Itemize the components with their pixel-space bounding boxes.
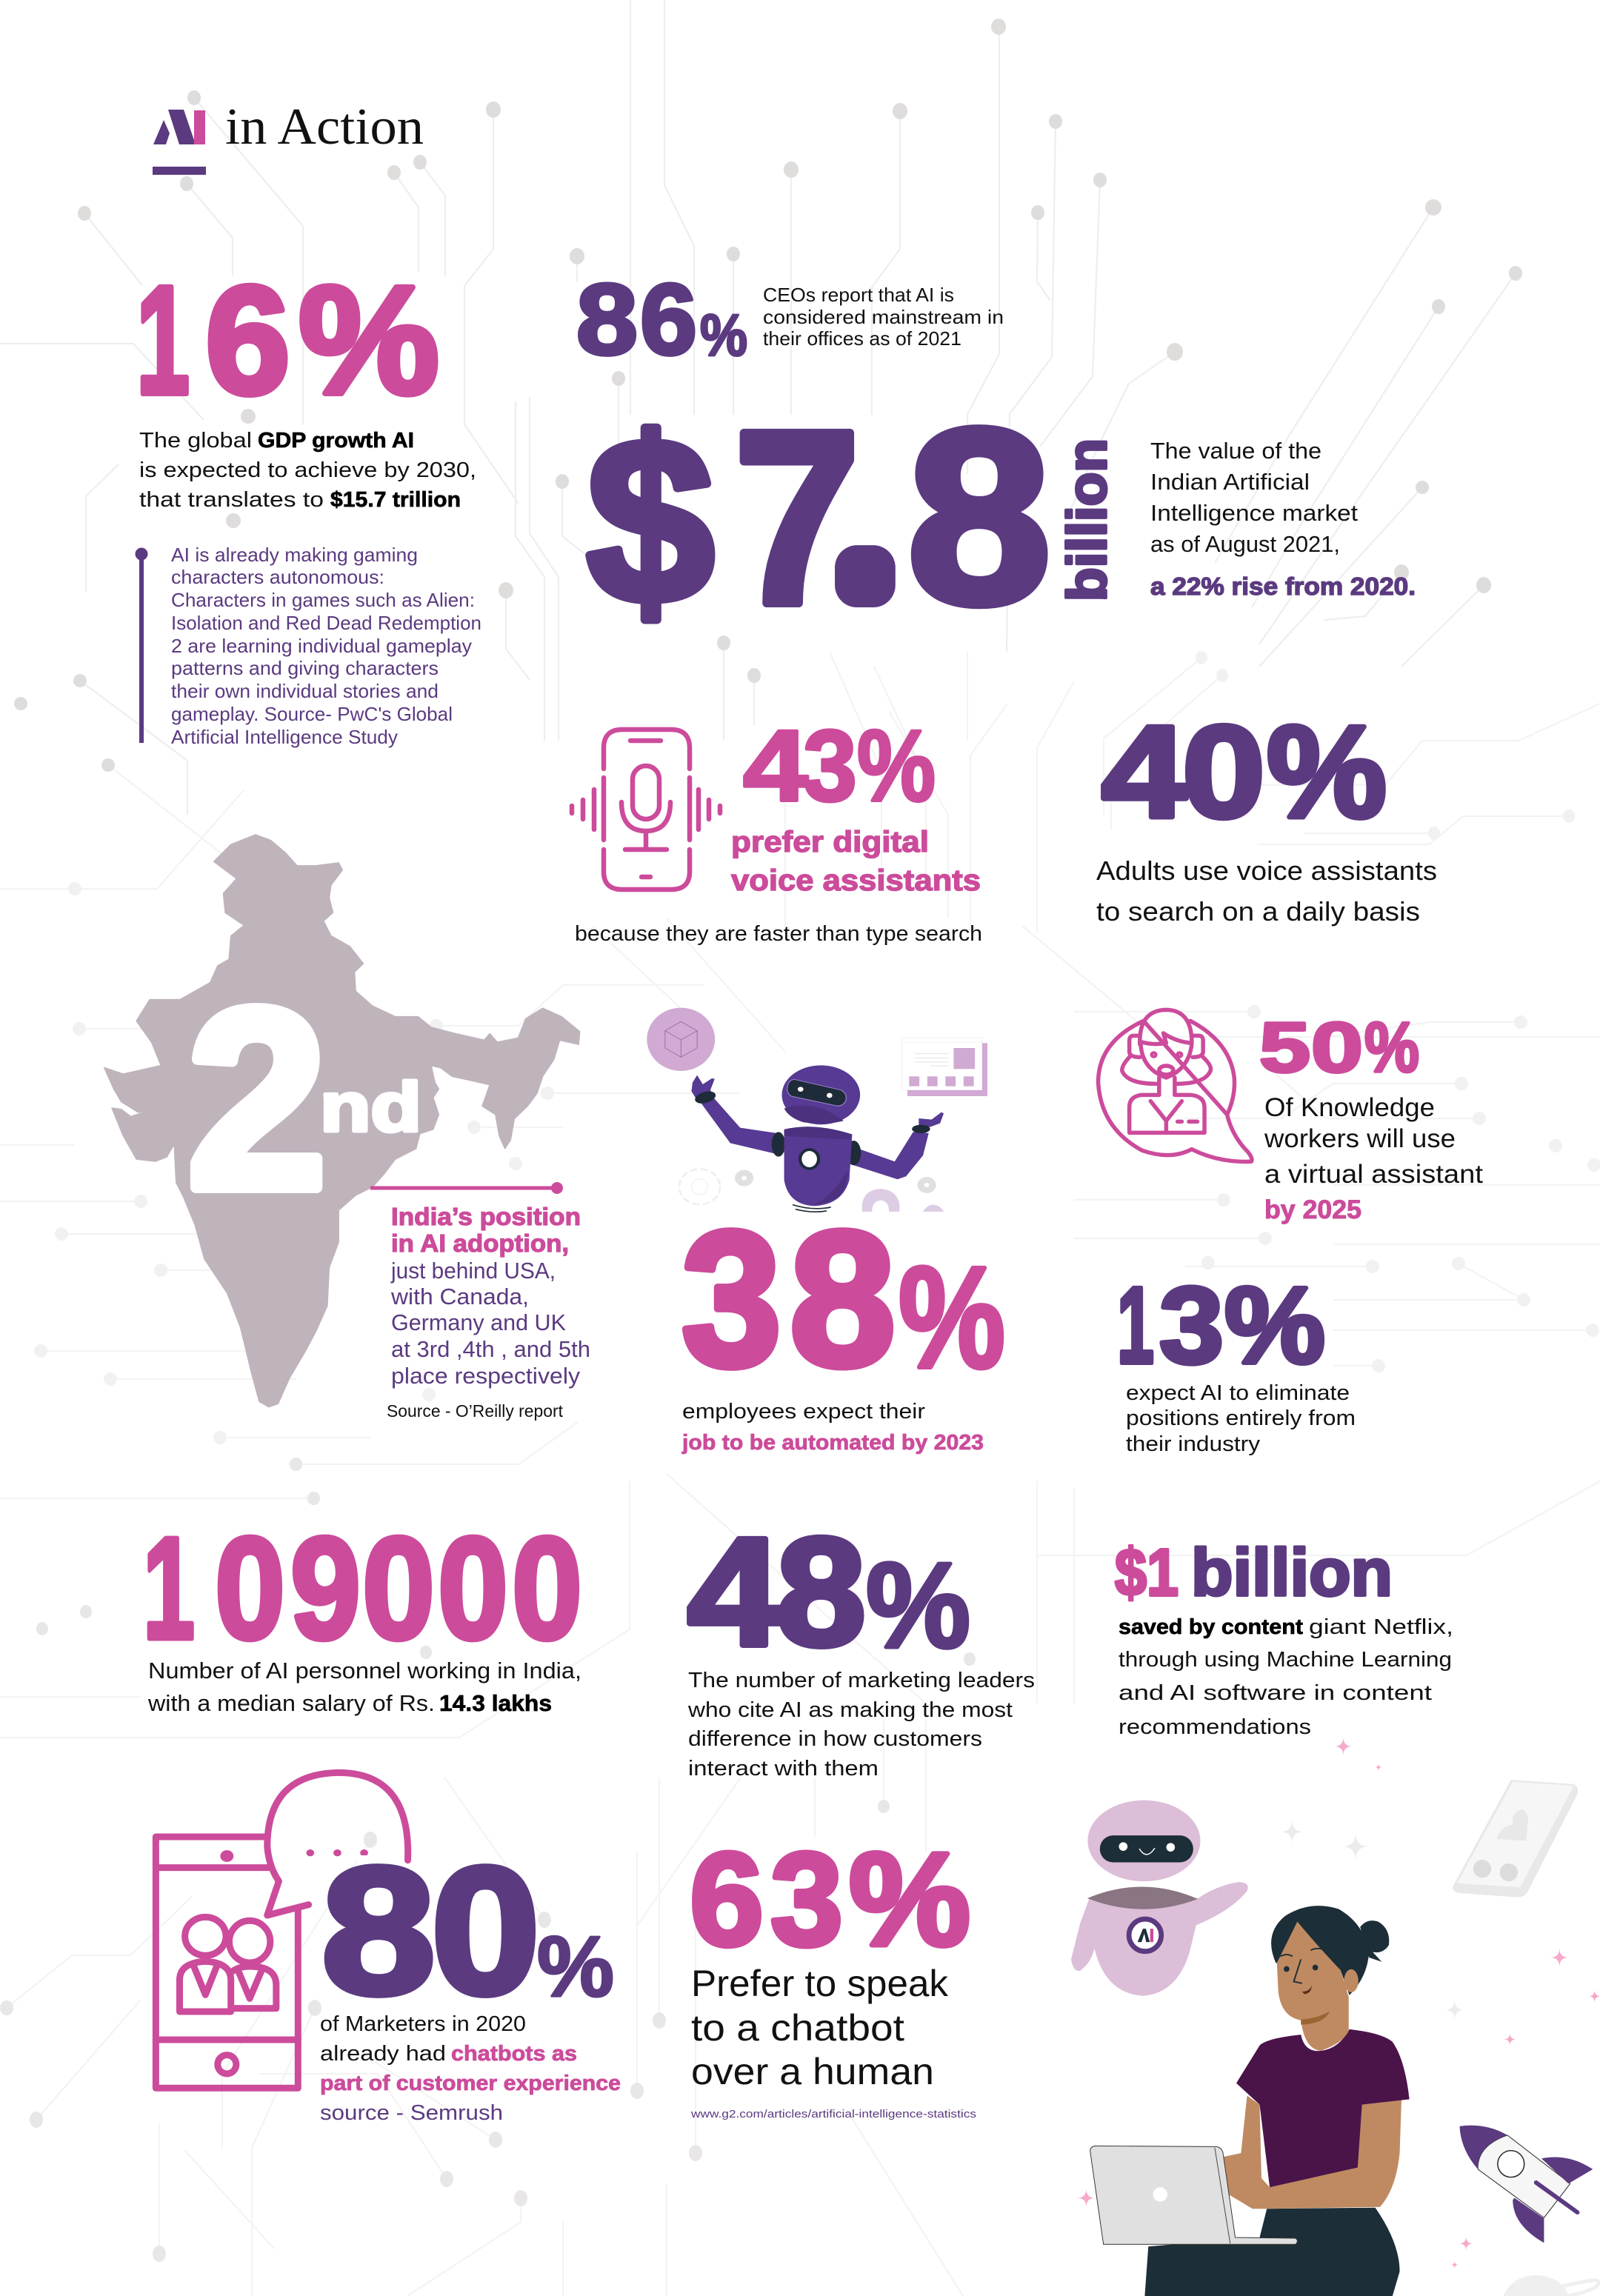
callout: gaming characters: gameplay. Source- PwC's Global [171,703,453,725]
stat: $7.8 billion Indian AI market: billion [1056,438,1118,601]
callout: India's position in AI adoption: India’s position [391,1203,581,1230]
icon: virtual assistant speech bubble [1099,1009,1252,1161]
stat: $7.8 billion Indian AI market [587,378,1416,655]
stat: $7.8 billion Indian AI market: $ [587,390,714,653]
illustration: laptop [1090,2146,1297,2244]
icon: phone with microphone [572,730,720,890]
stat: 43% prefer digital voice assistants: because they are faster than type search [575,922,982,946]
illustration: rocket [1459,2126,1593,2243]
stat: 50% knowledge workers: 5 [1259,1008,1310,1087]
illustration: woman at laptop [1144,1906,1410,2296]
stat: 40% adults use voice assistants: 4 [1101,698,1187,845]
stat: 109000 AI personnel: 14.3 lakhs [439,1690,552,1716]
stat: $7.8 billion Indian AI market: Indian Artificial [1150,469,1310,495]
stat: 43% prefer digital voice assistants [575,710,982,946]
stat: $1 billion Netflix: and AI software in content [1119,1681,1432,1705]
stat: 80% marketers chatbots: of Marketers in 2020 [320,2012,526,2036]
icon: gears [679,1169,944,1212]
stat: 16% GDP growth: The global [139,429,252,453]
stat: 38% job automation: job to be automated by 2023 [681,1431,984,1455]
stat: 63% prefer chatbot [690,1825,976,2120]
stat: 50% knowledge workers: Of Knowledge [1264,1093,1435,1122]
stat: 40% adults use voice assistants [1096,698,1437,927]
stat: 48% marketing leaders: who cite AI as making the most [687,1698,1013,1722]
stat: 80% marketers chatbots: 0 [431,1829,540,2032]
stat: 109000 AI personnel [143,1507,582,1716]
sparkles [1334,1737,1600,2269]
icon: browser window [901,1038,987,1096]
stat: 16% GDP growth: that translates to [139,488,324,512]
stat: 16% GDP growth: % [299,255,439,427]
stat: 13% eliminate positions: % [1224,1265,1325,1386]
stat: $7.8 billion Indian AI market: a 22% rise from 2020. [1150,573,1416,600]
stat: 13% eliminate positions: expect AI to eliminate [1126,1381,1350,1405]
stat: 50% knowledge workers: by 2025 [1264,1195,1361,1224]
illustration: pink robot [1071,1801,1248,1996]
stat: 13% eliminate positions: 1 [1117,1265,1154,1386]
callout: gaming characters: Artificial Intelligence Study [171,726,398,748]
stat: 48% marketing leaders [687,1506,1035,1781]
stat: 63% prefer chatbot: 3 [770,1825,843,1973]
stat: 38% job automation: employees expect their [682,1400,925,1424]
icon: tilted phone [1453,1780,1578,1898]
stat: 38% job automation: 8 [790,1192,896,1406]
stat: $1 billion Netflix: through using Machine Learning [1119,1648,1452,1672]
callout: India's position in AI adoption: at 3rd ,4th , and 5th [391,1336,590,1362]
stat: 48% marketing leaders: % [866,1538,970,1673]
callout: India's position in AI adoption: with Canada, [390,1284,529,1309]
stat: 43% prefer digital voice assistants: 3 [803,710,857,823]
stat: 43% prefer digital voice assistants: voice assistants [731,864,981,897]
stat: 63% prefer chatbot: 6 [690,1825,764,1973]
stat: 109000 AI personnel: 0 [512,1507,582,1669]
stat: $7.8 billion Indian AI market: as of August 2021, [1150,531,1340,557]
stat: 48% marketing leaders: interact with them [688,1757,879,1781]
stat: 80% marketers chatbots: source - Semrush [320,2101,503,2125]
map: India with 2nd: nd [320,1068,421,1146]
icon: phone with chat bubble and people [156,1772,408,2088]
stat: 80% marketers chatbots: part of customer experience [320,2072,621,2095]
illustration: purple robot [647,1008,987,1212]
stat: 50% knowledge workers: 0 [1311,1008,1363,1087]
callout: India's position in AI adoption [370,1182,590,1421]
stat: 109000 AI personnel: 0 [438,1507,508,1669]
callout: India's position in AI adoption: Source - O’Reilly report [387,1401,564,1421]
stat: 63% prefer chatbot: % [849,1825,970,1973]
stat: $7.8 billion Indian AI market: 8 [907,378,1051,655]
callout: gaming characters: characters autonomous: [171,566,384,588]
callout: gaming characters: AI is already making gaming [171,544,418,566]
stat: 40% adults use voice assistants: to search on a daily basis [1096,896,1420,927]
stat: 80% marketers chatbots [320,1829,621,2125]
stat: 109000 AI personnel: 9 [290,1507,361,1669]
callout: India's position in AI adoption: Germany and UK [391,1309,566,1335]
stat: 80% marketers chatbots: 8 [321,1829,436,2032]
callout: gaming characters: patterns and giving characters [171,657,439,679]
illustration: woman with laptop, robot, rocket and phone [1071,1737,1600,2296]
stat: 43% prefer digital voice assistants: prefer digital [731,826,929,858]
stat: $1 billion Netflix: giant Netflix, [1309,1615,1453,1639]
map: India with 2nd [104,835,580,1407]
stat: 109000 AI personnel: Number of AI personnel working in India, [148,1658,581,1683]
stat: 38% job automation: 3 [681,1192,781,1406]
stat: 86% CEOs: 6 [640,263,697,376]
stat: $7.8 billion Indian AI market: The value of the [1150,438,1321,464]
stat: $1 billion Netflix: $1 [1115,1536,1179,1610]
stat: $7.8 billion Indian AI market: Intelligence market [1150,500,1358,526]
stat: 13% eliminate positions: their industry [1126,1432,1261,1456]
stat: 50% knowledge workers: a virtual assistant [1264,1160,1483,1189]
callout: gaming characters [135,544,481,748]
stat: 48% marketing leaders: 8 [776,1506,866,1678]
stat: 63% prefer chatbot: www.g2.com/articles/artificial-intelligence-statistics [690,2108,976,2120]
stat: 86% CEOs: CEOs report that AI is [763,284,954,306]
callout: India's position in AI adoption: in AI adoption, [391,1229,569,1257]
callout: gaming characters: Isolation and Red Dead Redemption [171,612,481,634]
stat: 16% GDP growth: 6 [205,255,290,427]
stat: $1 billion Netflix: recommendations [1119,1715,1311,1739]
stat: 86% CEOs: considered mainstream in [763,306,1004,328]
stat: 16% GDP growth [136,255,476,512]
stat: $1 billion Netflix: billion [1191,1536,1393,1610]
callout: gaming characters: their own individual stories and [171,680,439,702]
stat: 80% marketers chatbots: chatbots as [451,2042,577,2066]
stat: 13% eliminate positions: positions entirely from [1126,1406,1356,1430]
stat: 40% adults use voice assistants: 0 [1182,698,1265,845]
stat: 16% GDP growth: GDP growth AI [258,429,414,453]
stat: 109000 AI personnel: 0 [215,1507,285,1669]
stat: 48% marketing leaders: The number of marketing leaders [688,1669,1035,1692]
callout: India's position in AI adoption: just behind USA, [390,1258,556,1284]
map: India with 2nd: 2 [187,957,327,1242]
stat: 48% marketing leaders: difference in how customers [688,1727,982,1751]
title: AI in Action [153,99,424,175]
stat: 43% prefer digital voice assistants: 4 [743,710,808,823]
stat: 48% marketing leaders: 4 [687,1506,781,1678]
stat: 16% GDP growth: is expected to achieve by 2030, [139,458,476,482]
stat: 86% CEOs: their offices as of 2021 [763,327,961,350]
stat: 109000 AI personnel: with a median salary of Rs. [147,1690,435,1716]
stat: 16% GDP growth: $15.7 trillion [330,488,461,512]
illustration: planet [1502,2275,1599,2296]
stat: 50% knowledge workers: % [1364,1008,1419,1087]
stat: 13% eliminate positions: 3 [1159,1265,1224,1386]
stat: 109000 AI personnel: 0 [362,1507,435,1669]
stat: 80% marketers chatbots: % [537,1918,614,2015]
stat: 13% eliminate positions [1117,1265,1356,1456]
stat: 40% adults use voice assistants: % [1267,698,1387,845]
stat: 109000 AI personnel: 1 [143,1507,195,1669]
callout: gaming characters: 2 are learning individual gameplay [171,635,472,657]
stat: 63% prefer chatbot: Prefer to speak [691,1963,949,2004]
stat: 63% prefer chatbot: to a chatbot [691,2007,904,2049]
stat: 86% CEOs: 8 [576,263,638,376]
stat: $1 billion Netflix [1115,1536,1453,1739]
callout: India's position in AI adoption: place respectively [391,1363,581,1389]
stat: 43% prefer digital voice assistants: % [857,710,936,823]
stat: 50% knowledge workers: workers will use [1264,1124,1456,1153]
stat: 40% adults use voice assistants: Adults use voice assistants [1096,855,1437,886]
stat: 86% CEOs [576,263,1004,376]
stat: 38% job automation [681,1192,1005,1455]
stat: 38% job automation: % [899,1237,1005,1398]
title: AI in Action: in Action [225,99,424,156]
robot body [691,1065,944,1212]
stat: 63% prefer chatbot: over a human [691,2051,934,2092]
stat: 16% GDP growth: 1 [136,255,190,427]
icon: cube circle [647,1008,715,1071]
stat: 86% CEOs: % [700,302,747,368]
stat: $1 billion Netflix: saved by content [1119,1615,1303,1639]
stat: 50% knowledge workers [1259,1008,1483,1224]
callout: gaming characters: Characters in games such as Alien: [171,589,475,611]
stat: 80% marketers chatbots: already had [320,2042,446,2066]
stat: $7.8 billion Indian AI market: 7 [734,380,860,655]
logo mark [153,110,205,144]
stat: $7.8 billion Indian AI market: . [849,478,881,610]
